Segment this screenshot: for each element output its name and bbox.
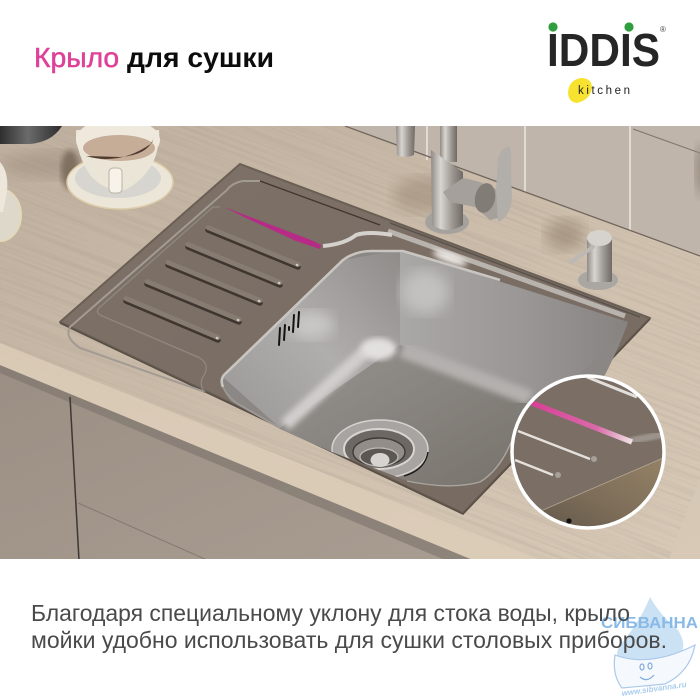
- watermark bath: [614, 645, 695, 688]
- zoom lens circle: [510, 374, 666, 530]
- description text: [31, 600, 667, 653]
- cup body: [76, 130, 159, 190]
- faucet handle: [443, 178, 498, 220]
- bowl rim highlight: [222, 251, 500, 387]
- faucet body: [431, 150, 463, 230]
- title: Крыло для сушки: [34, 42, 274, 73]
- logo: IDDIS kitchen: [547, 22, 666, 103]
- coffee cup: [61, 118, 173, 209]
- drain strainer: [332, 420, 428, 478]
- kettle base: [0, 126, 62, 144]
- description line 2: мойки удобно использовать для сушки столовых приборов.: [31, 627, 667, 653]
- second cup: [0, 162, 21, 241]
- saucer: [67, 155, 173, 209]
- bowl floor: [288, 373, 530, 485]
- watermark: Sibvanna: [601, 597, 698, 698]
- logo kitchen word: kitchen: [578, 85, 630, 97]
- coffee: [83, 135, 155, 161]
- faucet base: [425, 214, 469, 234]
- logo registered mark: ®: [660, 25, 666, 34]
- cup rim: [76, 126, 160, 147]
- faucet neck: [440, 126, 457, 162]
- drying ribs: [126, 228, 298, 340]
- wall tiles: [345, 126, 700, 256]
- watermark url: www.sibvanna.ru: [621, 680, 687, 698]
- cabinet fronts: [0, 365, 473, 560]
- drainboard inner rim: [98, 207, 220, 393]
- soap dispenser: [571, 230, 618, 290]
- overflow slots: [279, 312, 299, 345]
- faucet lever: [496, 147, 512, 222]
- logo wordmark: IDDIS: [547, 24, 660, 76]
- countertop: [0, 126, 700, 559]
- rear rim highlight: [388, 231, 625, 316]
- lens pink highlight: [532, 403, 632, 442]
- drainboard outer rim: [68, 181, 260, 392]
- cup handle: [109, 168, 122, 193]
- watermark drop: [617, 597, 683, 662]
- description line 1: Благодаря специальному уклону для стока воды, крыло: [31, 600, 630, 626]
- countertop front lip: [0, 343, 540, 560]
- sink body: [60, 164, 650, 514]
- bowl left wall: [223, 250, 400, 428]
- pink highlight on drainboard: [224, 207, 321, 249]
- kitchen photo: [0, 126, 700, 559]
- lens dark corner: [566, 518, 572, 524]
- bright wing curve: [323, 233, 392, 246]
- lens silver smear: [630, 434, 665, 441]
- second pipe: [396, 126, 415, 157]
- drainboard panel: [68, 181, 392, 393]
- watermark face: [640, 663, 654, 680]
- lens top rim: [587, 377, 637, 397]
- bowl right wall: [400, 252, 608, 399]
- logo green dot right: [624, 22, 634, 32]
- lens tan cabinet area: [542, 459, 662, 526]
- logo green dot left: [548, 22, 558, 32]
- logo yellow blob: [568, 78, 592, 103]
- sink bowl: [222, 250, 640, 495]
- faucet: [396, 126, 512, 234]
- watermark name: СИБВАННА: [601, 615, 698, 632]
- lens ribs: [515, 431, 590, 475]
